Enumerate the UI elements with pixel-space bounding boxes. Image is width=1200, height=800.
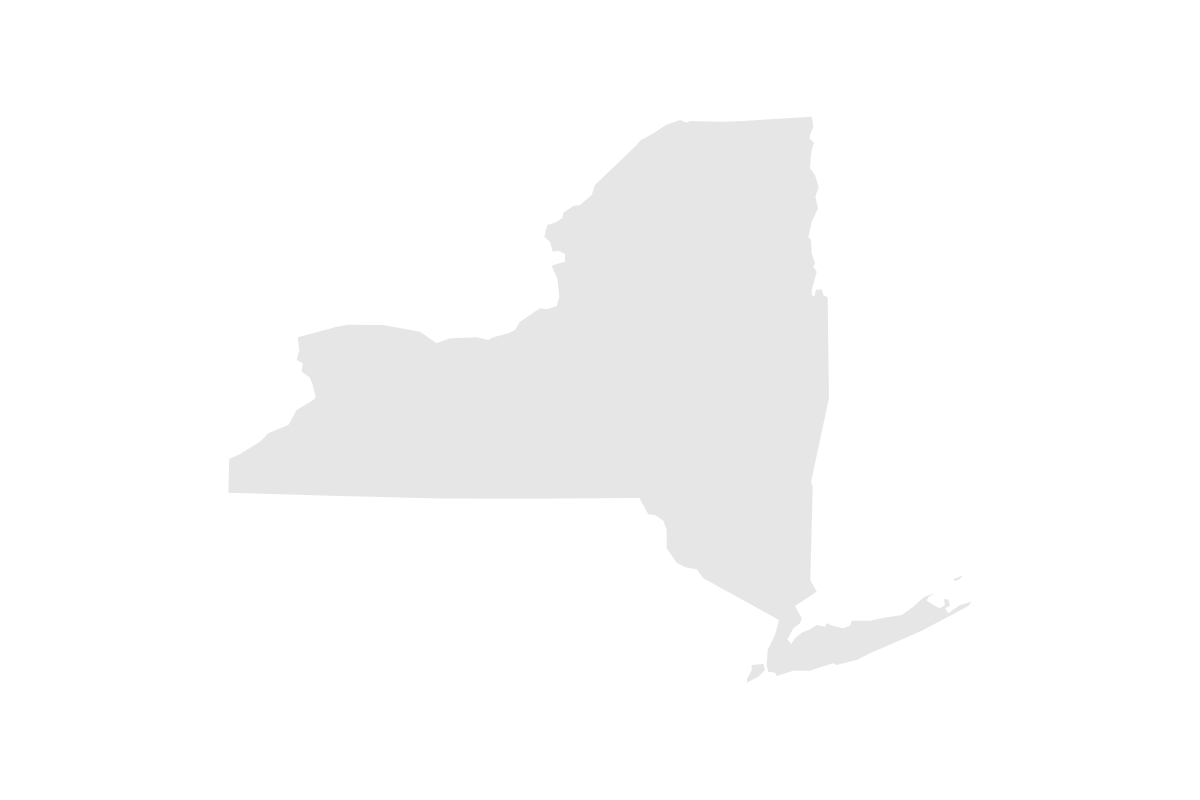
Staten Island shape [747,664,765,683]
mainland and Long Island shape [228,117,972,676]
small island off Long Island [953,575,963,581]
